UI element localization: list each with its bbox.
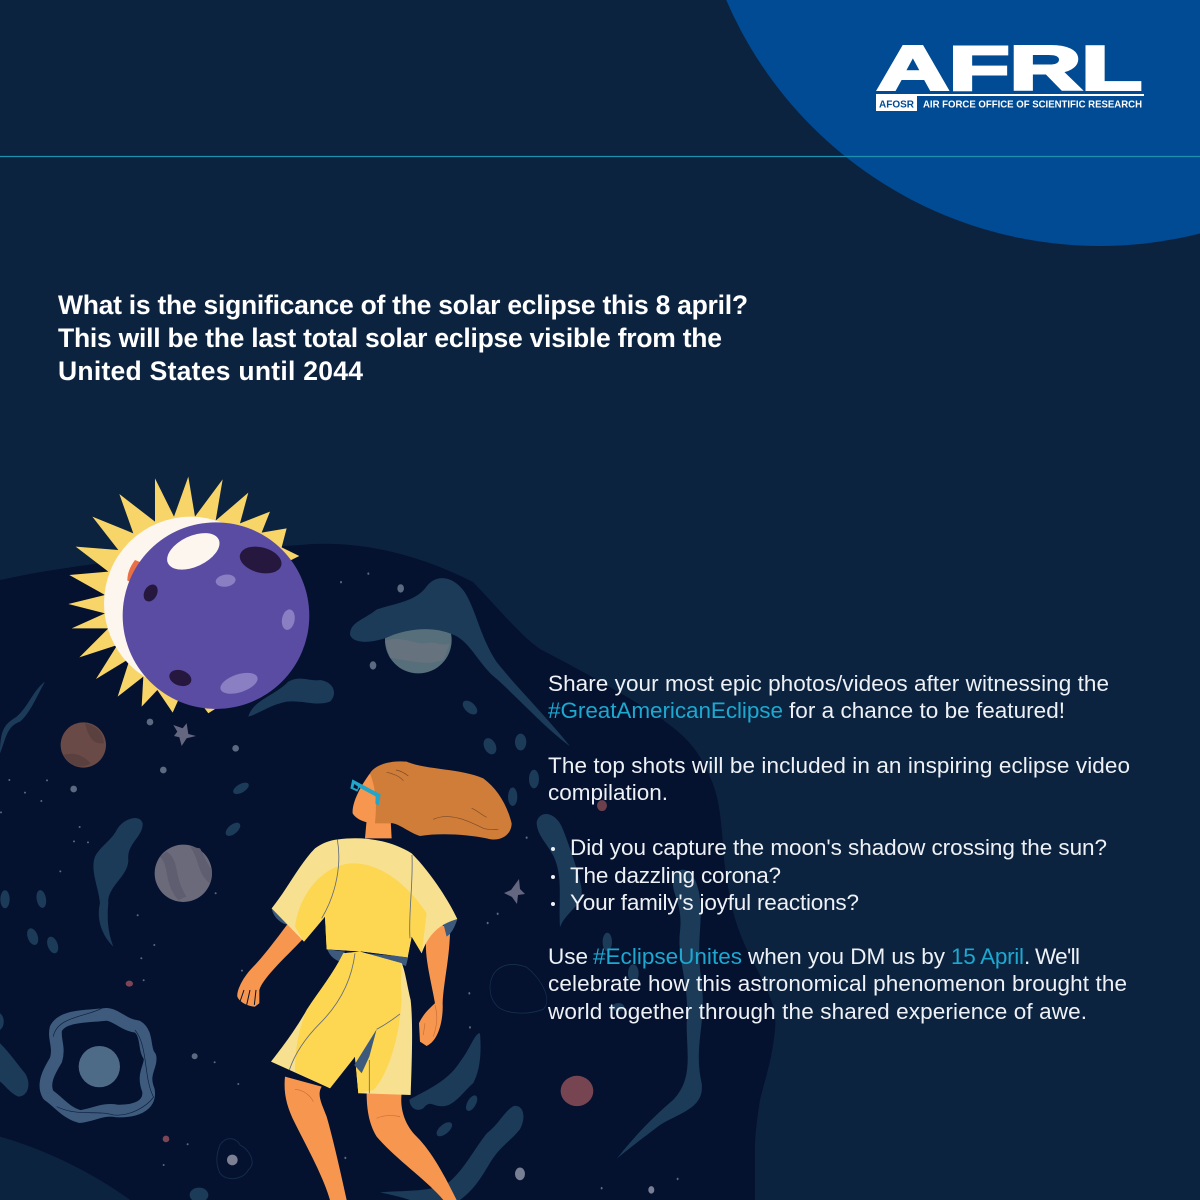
small stars <box>340 572 679 1194</box>
bubbles <box>435 698 639 1139</box>
nebula ribbon: bottom <box>380 1106 523 1200</box>
paragraph 3: We'll <box>1035 944 1080 969</box>
nebula ribbon: lower left <box>0 1043 28 1097</box>
dark space blob background <box>0 544 775 1200</box>
blue corner circle <box>693 0 1200 246</box>
space decorations: right side <box>340 572 703 1200</box>
logo: AFRL: AIR FORCE OFFICE OF SCIENTIFIC RESEARCH <box>923 98 1142 110</box>
neck and face <box>353 773 392 838</box>
paragraph 3 <box>547 944 1127 1024</box>
planet: grey banded <box>155 845 212 902</box>
paragraph 3: Use <box>548 944 588 969</box>
hair <box>370 761 512 840</box>
legs <box>285 1077 457 1200</box>
paragraph 2: compilation. <box>548 780 668 805</box>
bullet list: Did you capture the moon's shadow crossing the sun? <box>570 835 1107 860</box>
heading: What is the significance of the solar eclipse this 8 april? <box>58 290 748 320</box>
ringed egg planet <box>46 1008 154 1117</box>
dots <box>0 719 243 1166</box>
logo: AFRL <box>876 34 1144 111</box>
person with eclipse glasses <box>237 761 512 1200</box>
logo: AFRL: AFRL <box>877 34 1142 104</box>
paragraph 3: . <box>1024 944 1030 969</box>
shorts <box>271 952 412 1095</box>
body text <box>547 671 1130 1024</box>
star <box>173 723 196 746</box>
nebula blob: middle <box>537 814 582 927</box>
sun rays <box>68 477 299 713</box>
logo: AFRL: AFOSR <box>879 98 914 110</box>
bullet list: Your family's joyful reactions? <box>570 890 859 915</box>
planet: brown <box>61 722 106 768</box>
nebula ribbon: right <box>617 870 703 1159</box>
nebula ribbon: centre <box>93 818 143 947</box>
heading: United States until 2044 <box>58 356 363 386</box>
bullet list: The dazzling corona? <box>570 863 781 888</box>
moon <box>123 522 309 709</box>
bubbles <box>0 780 251 1200</box>
nebula ribbon: top left <box>0 682 45 753</box>
small flower outline <box>217 1139 252 1179</box>
paragraph 1 <box>548 671 1109 723</box>
outline bubble <box>490 965 547 1013</box>
sun flare <box>127 560 143 583</box>
arms <box>237 918 450 1046</box>
paragraph 3: 15 April <box>951 944 1024 969</box>
paragraph 1: for a chance to be featured! <box>789 698 1065 723</box>
paragraph 1: Share your most epic photos/videos after witnessing the <box>548 671 1109 696</box>
space decorations: left side <box>0 682 252 1200</box>
rose dot <box>597 800 607 811</box>
paragraph 3: when you DM us by <box>747 944 946 969</box>
glasses <box>350 779 381 806</box>
lower left corner shape <box>0 1137 130 1200</box>
eclipse <box>68 477 334 746</box>
nebula blob by moon <box>248 679 334 717</box>
paragraph 3: world together through the shared experience of awe. <box>547 999 1087 1024</box>
planet: rose <box>561 1076 593 1106</box>
star: right of figure <box>504 879 525 904</box>
sleeve undersides <box>272 908 457 966</box>
paragraph 3: celebrate how this astronomical phenomenon brought the <box>548 971 1127 996</box>
bullet list <box>551 835 1107 915</box>
paragraph 3: #EclipseUnites <box>593 944 742 969</box>
planet: teal grey <box>385 607 452 673</box>
heading <box>58 290 748 386</box>
moon highlights <box>141 526 296 698</box>
shirt <box>272 838 457 957</box>
paragraph 2: The top shots will be included in an inspiring eclipse video <box>548 753 1130 778</box>
nebula leaf: lower <box>409 1033 481 1110</box>
nebula blob: top <box>350 578 570 746</box>
paragraph 1: #GreatAmericanEclipse <box>548 698 783 723</box>
sun disc <box>104 517 277 690</box>
paragraph 2 <box>548 753 1130 805</box>
heading: This will be the last total solar eclipse visible from the <box>58 323 722 353</box>
